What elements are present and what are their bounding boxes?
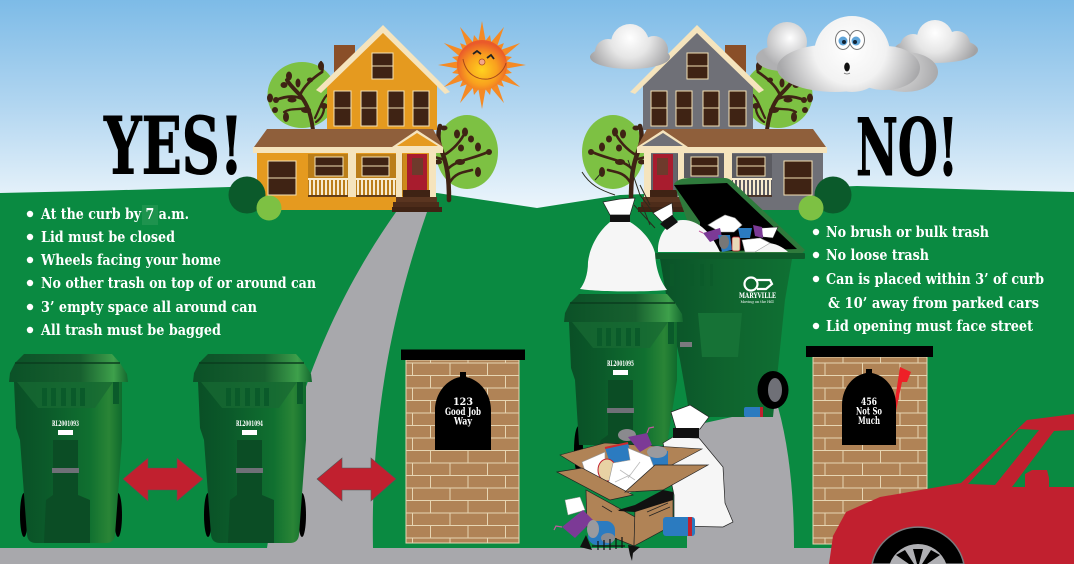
red car: [829, 414, 1074, 564]
overflowing rear trash bin: [653, 178, 805, 417]
text block: no rules: Lid opening must face street: [826, 317, 1033, 335]
logo: City of Maryville: [739, 278, 776, 304]
logo: City of Maryville: MARYVILLE: [739, 291, 776, 300]
text block: yes rules: At the curb by 7 a.m.: [40, 205, 189, 223]
blue can on driveway: [744, 407, 763, 417]
highlight behind the 7: [142, 205, 158, 225]
cloud: small right: [894, 20, 978, 63]
white trash bag on bin: [580, 198, 667, 291]
overflowing cardboard box: [554, 427, 708, 561]
brick mailbox: 123 Good Job Way: Way: [453, 416, 473, 428]
brick mailbox: 123 Good Job Way: [401, 350, 525, 543]
front trash bin: RL2001095: [607, 359, 634, 368]
text block: yes rules: [27, 205, 316, 339]
brick mailbox: 123 Good Job Way: Good Job: [445, 407, 481, 418]
white trash bag behind box: [663, 405, 733, 527]
text block: no rules: [813, 223, 1044, 335]
driveway, no side: [687, 407, 794, 548]
trash bin 2: RL2001094: [236, 419, 263, 428]
text block: no rules: & 10’ away from parked cars: [828, 294, 1039, 312]
icon: smiling sun: [438, 21, 526, 109]
brick mailbox: 456 Not So Much: 456: [861, 397, 877, 408]
text block: no rules: No brush or bulk trash: [826, 223, 989, 241]
driveway, yes side: [267, 212, 427, 548]
trash bin 2: [193, 354, 312, 543]
cloud: small left: [590, 24, 670, 69]
loose brush and branches: [582, 160, 655, 228]
arrow: space between bin and mailbox: [317, 458, 396, 501]
front trash bin: [564, 294, 683, 474]
sidewalk: [0, 548, 1074, 564]
house: yes, orange: [228, 25, 498, 220]
text block: yes rules: No other trash on top of or around can: [41, 274, 316, 292]
trash bin 1: [9, 354, 128, 543]
text block: yes rules: Wheels facing your home: [40, 251, 221, 269]
heading: NO!: NO!: [856, 101, 958, 194]
text block: yes rules: Lid must be closed: [41, 228, 175, 246]
arrow: space between bins: [123, 458, 203, 501]
brick mailbox: 456 Not So Much: Not So: [856, 406, 882, 418]
spilled cans and bones: [554, 497, 695, 561]
text block: no rules: No loose trash: [826, 246, 929, 264]
brick mailbox: 456 Not So Much: [806, 346, 933, 544]
brick mailbox: 456 Not So Much: Much: [858, 416, 881, 427]
text block: yes rules: All trash must be bagged: [40, 321, 221, 339]
heading: YES!: YES!: [103, 100, 243, 192]
green lawn: [0, 186, 1074, 564]
text block: yes rules: 3’ empty space all around can: [41, 298, 257, 316]
brick mailbox: 123 Good Job Way: 123: [453, 397, 473, 408]
cloud: surprised face: [756, 16, 938, 92]
trash bin 1: RL2001093: [52, 419, 79, 428]
logo: City of Maryville: Moving on the Hill: [740, 300, 774, 304]
house: no, gray: [582, 25, 852, 220]
